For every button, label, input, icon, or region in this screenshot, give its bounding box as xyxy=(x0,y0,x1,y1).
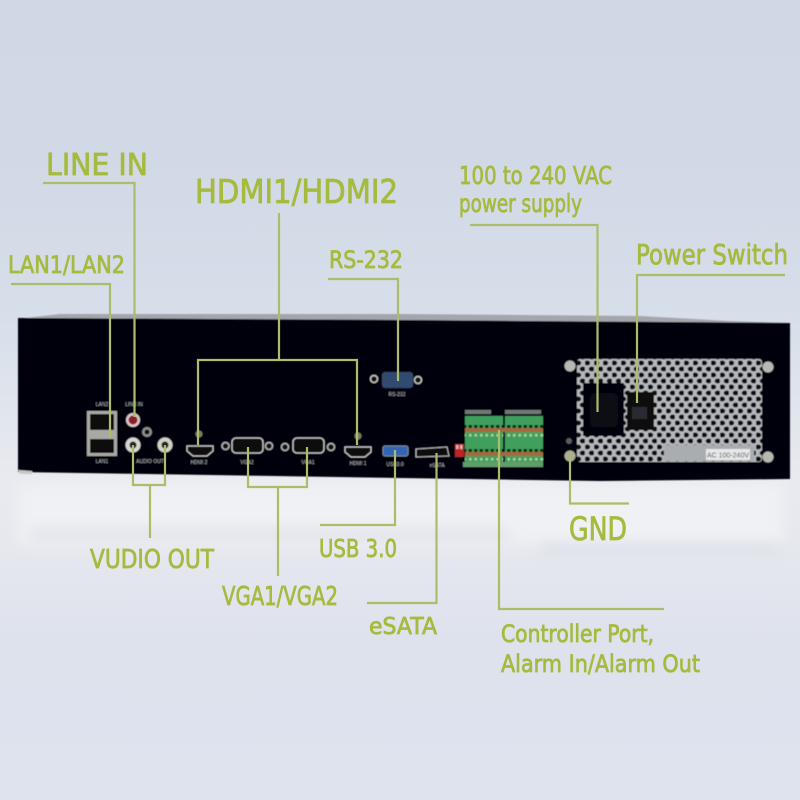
power supply grille xyxy=(577,359,762,462)
label: LAN1/LAN2: LAN1/LAN2 xyxy=(8,251,125,279)
port: VGA 1: VGA1 xyxy=(301,460,315,466)
port: eSATA: eSATA xyxy=(429,463,445,469)
port: VGA 1 xyxy=(282,438,334,466)
leader line: HDMI1/HDMI2 xyxy=(198,213,357,445)
label: 100 to 240 VAC power supply xyxy=(459,161,612,218)
label: RS-232: RS-232 xyxy=(329,246,403,274)
port: USB 3.0 xyxy=(383,446,408,468)
power switch xyxy=(627,392,654,430)
leader line: controller port xyxy=(499,430,664,609)
port: LAN1/LAN2 xyxy=(87,402,117,465)
device: chassis and ports xyxy=(18,314,790,481)
leader line: LAN1/LAN2 xyxy=(11,284,110,438)
leader line: VGA xyxy=(248,447,307,576)
label: 100 to 240 VAC power supply: 100 to 240 VAC xyxy=(459,161,612,190)
leader line: RS-232 xyxy=(328,279,398,381)
port: eSATA xyxy=(416,447,449,469)
label: LINE IN: LINE IN xyxy=(46,148,148,183)
label: Controller Port, Alarm In/Alarm Out: Controller Port, xyxy=(501,620,654,648)
switch: red DIP xyxy=(455,444,464,457)
label: Controller Port, Alarm In/Alarm Out: Alarm In/Alarm Out xyxy=(501,650,700,678)
port: RS-232 xyxy=(370,372,422,398)
label: HDMI1/HDMI2: HDMI1/HDMI2 xyxy=(195,172,398,211)
port: LAN1/LAN2: LAN1 xyxy=(96,459,108,465)
leader line: audio out xyxy=(133,445,165,538)
port: HDMI 2: HDMI 2 xyxy=(191,460,208,466)
port: RS-232: RS-232 xyxy=(389,392,406,398)
power inlet xyxy=(583,383,624,436)
port: HDMI 1 xyxy=(345,432,371,467)
leader line: power supply xyxy=(470,225,598,412)
label: GND: GND xyxy=(569,510,627,548)
label: Controller Port, Alarm In/Alarm Out xyxy=(501,620,700,678)
label: eSATA: eSATA xyxy=(369,614,437,640)
port: HDMI 2 xyxy=(187,430,213,466)
leader line: LINE IN xyxy=(43,183,134,417)
port: audio out jacks: AUDIO OUT xyxy=(136,459,164,465)
port: USB 3.0: USB3.0 xyxy=(386,462,404,468)
port: LAN1/LAN2: LAN2 xyxy=(96,402,108,408)
port: VGA 2 xyxy=(222,438,272,466)
port: LINE IN jack: LINE IN xyxy=(125,402,143,408)
leader line: eSATA xyxy=(367,453,436,603)
power supply grille: AC 100-240V xyxy=(707,452,749,460)
terminal blocks: controller and alarm xyxy=(463,410,543,467)
label: 100 to 240 VAC power supply: power supply xyxy=(459,189,582,218)
port: VGA 2: VGA2 xyxy=(240,460,254,466)
leader line: GND xyxy=(570,460,629,504)
device chassis xyxy=(18,314,790,481)
label: USB 3.0: USB 3.0 xyxy=(319,534,397,563)
port: LINE IN jack xyxy=(125,402,143,427)
label: VGA1/VGA2: VGA1/VGA2 xyxy=(222,582,338,612)
leader line: USB 3.0 xyxy=(320,450,395,525)
port: HDMI 1: HDMI 1 xyxy=(350,461,367,467)
port: audio out jacks xyxy=(126,427,172,465)
screws xyxy=(564,360,774,462)
leader line: power switch xyxy=(637,275,785,403)
label: VUDIO OUT: VUDIO OUT xyxy=(90,545,214,575)
